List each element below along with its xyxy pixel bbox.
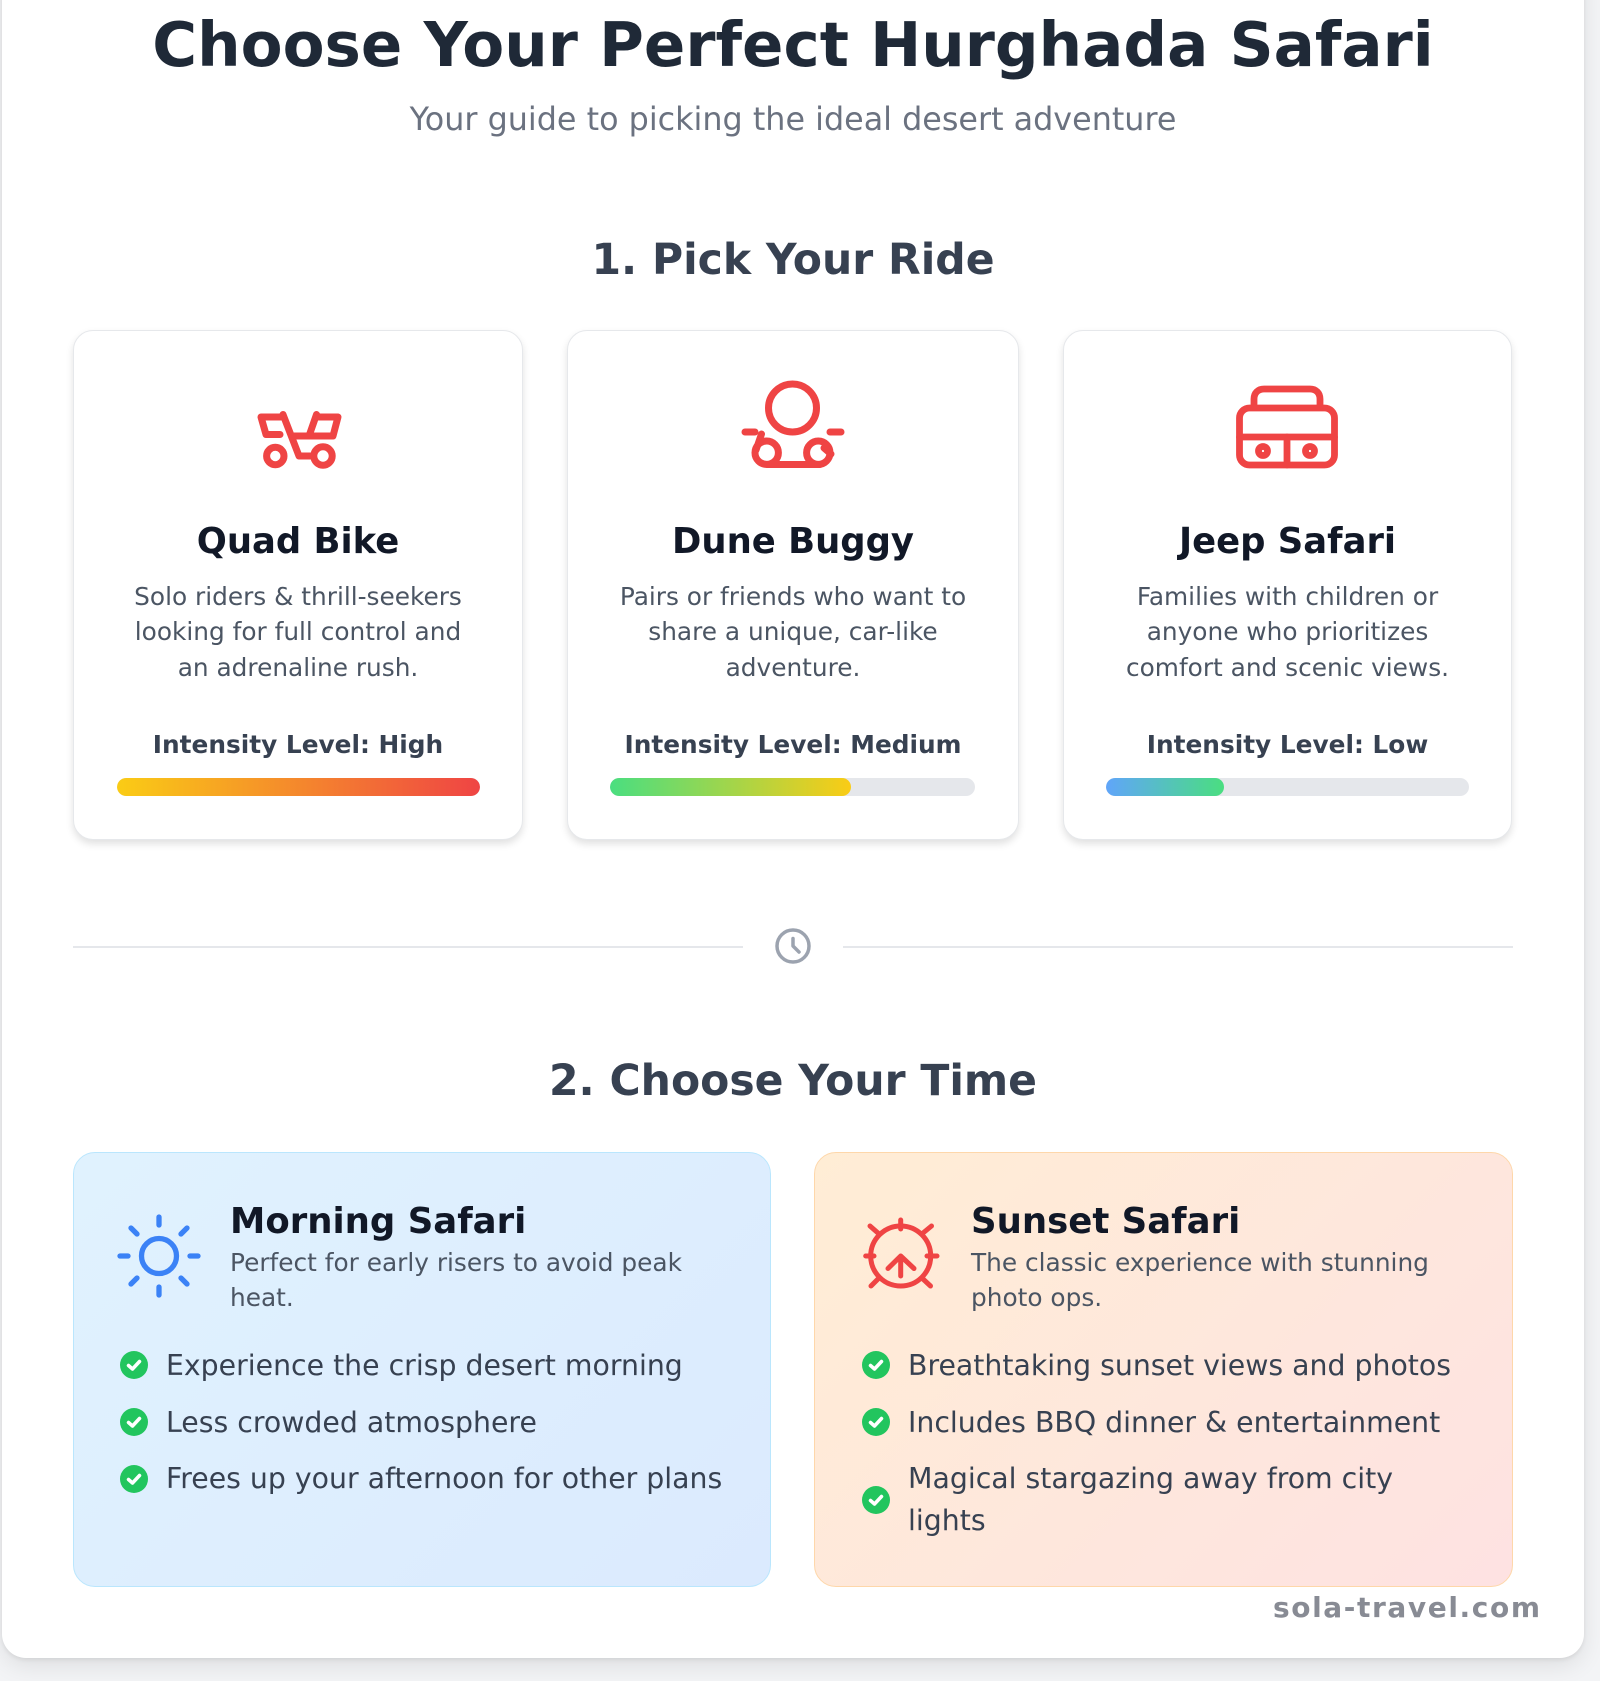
- sunset benefit 2: [862, 1406, 1440, 1439]
- morning benefit 2: [120, 1406, 537, 1439]
- sunset description: The classic experience with stunning photo ops.: [971, 1248, 1429, 1312]
- card title: Quad Bike: [197, 521, 399, 562]
- benefit text: Frees up your afternoon for other plans: [166, 1462, 722, 1495]
- check icon: [120, 1408, 148, 1436]
- heading: sunset safari: Sunset Safari: [971, 1201, 1240, 1242]
- intensity label: Intensity Level: Medium: [624, 730, 962, 759]
- card description: Families with children or anyone who prioritizes comfort and scenic views.: [1126, 582, 1449, 682]
- benefit text: Less crowded atmosphere: [166, 1406, 537, 1439]
- benefit text: Magical stargazing away from city lights: [908, 1462, 1393, 1537]
- intensity bar: medium: [610, 778, 975, 796]
- morning description: Perfect for early risers to avoid peak heat.: [230, 1248, 682, 1312]
- card title: Dune Buggy: [672, 521, 914, 562]
- check icon: [120, 1351, 148, 1379]
- sunset benefit 1: [862, 1349, 1451, 1382]
- panel: morning safari: [73, 1152, 771, 1587]
- panel: sunset safari: [814, 1152, 1513, 1587]
- watermark: sola-travel.com: [1273, 1591, 1542, 1624]
- icon: sunset: [863, 1218, 940, 1288]
- card description: Solo riders & thrill-seekers looking for full control and an adrenaline rush.: [134, 582, 462, 682]
- icon: sun: [117, 1214, 201, 1298]
- subtitle: Your guide to picking the ideal desert adventure: [410, 101, 1176, 138]
- intensity label: Intensity Level: Low: [1147, 730, 1428, 759]
- panel: quad bike: [73, 330, 523, 840]
- heading: choose your time: 2. Choose Your Time: [549, 1057, 1037, 1106]
- benefit text: Breathtaking sunset views and photos: [908, 1349, 1451, 1382]
- sunset benefit 3: [862, 1462, 1393, 1537]
- intensity bar: high: [117, 778, 480, 796]
- heading: morning safari: Morning Safari: [230, 1201, 526, 1242]
- card description: Pairs or friends who want to share a unique, car-like adventure.: [620, 582, 966, 682]
- check icon: [862, 1408, 890, 1436]
- check icon: [862, 1351, 890, 1379]
- benefit text: Experience the crisp desert morning: [166, 1349, 683, 1382]
- heading: pick your ride: 1. Pick Your Ride: [591, 236, 995, 285]
- intensity bar: low: [1106, 778, 1469, 796]
- intensity label: Intensity Level: High: [153, 730, 443, 759]
- card title: Jeep Safari: [1179, 521, 1396, 562]
- morning benefit 3: [120, 1462, 722, 1495]
- benefit text: Includes BBQ dinner & entertainment: [908, 1406, 1440, 1439]
- panel: jeep safari: [1063, 330, 1512, 840]
- title: Choose Your Perfect Hurghada Safari: [152, 10, 1434, 81]
- panel: dune buggy: [567, 330, 1019, 840]
- icon: dune buggy: [742, 380, 844, 468]
- icon: jeep: [1236, 386, 1338, 468]
- icon: quad bike: [258, 411, 342, 469]
- icon: clock: [775, 928, 811, 964]
- check icon: [862, 1486, 890, 1514]
- check icon: [120, 1465, 148, 1493]
- morning benefit 1: [120, 1349, 683, 1382]
